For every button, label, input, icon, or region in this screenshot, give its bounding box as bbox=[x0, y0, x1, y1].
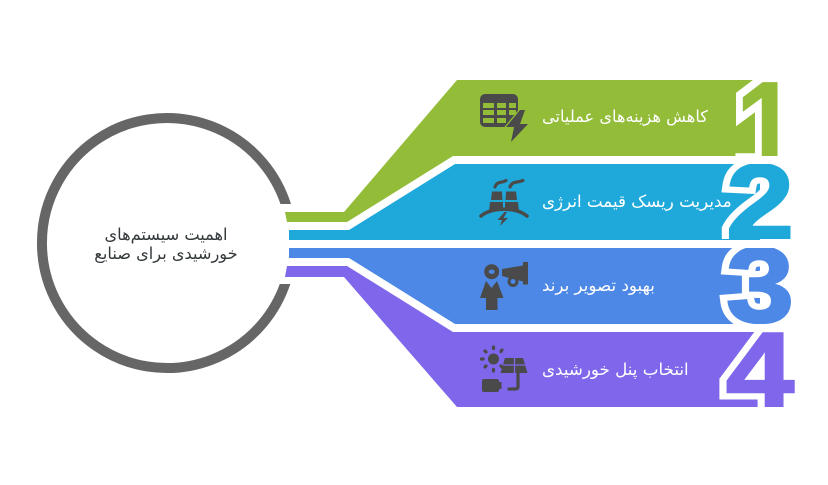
icon: power plant bbox=[481, 180, 527, 226]
center title: اهمیت سیستم‌های bbox=[104, 225, 228, 244]
digit 4 bbox=[719, 332, 795, 407]
band 4 purple bbox=[285, 266, 795, 407]
label 3: بهبود تصویر برند bbox=[542, 275, 655, 295]
icon: sun, solar panel and battery bbox=[482, 347, 528, 392]
icon: person with megaphone bbox=[480, 262, 528, 310]
center title bbox=[94, 225, 238, 263]
digit 2: 2 bbox=[726, 143, 794, 262]
label 2: مدیریت ریسک قیمت انرژی bbox=[542, 191, 732, 211]
digit 3: 3 bbox=[726, 226, 794, 345]
label 4: انتخاب پنل خورشیدی bbox=[542, 359, 689, 379]
label 1: کاهش هزینه‌های عملیاتی bbox=[542, 107, 708, 126]
band 1 green bbox=[285, 80, 778, 222]
center title: خورشیدی برای صنایع bbox=[94, 244, 238, 263]
digit 1: 1 bbox=[735, 53, 799, 204]
digit 3: 3 bbox=[726, 226, 794, 345]
icon: table with lightning bolt bbox=[480, 94, 528, 142]
ring bbox=[42, 118, 288, 368]
band 3 periwinkle bbox=[289, 248, 791, 324]
digit 2: 2 bbox=[726, 143, 794, 262]
digit 3 bbox=[719, 248, 791, 324]
digit 4: 4 bbox=[726, 311, 794, 430]
band 2 blue bbox=[289, 164, 790, 240]
digit 2 bbox=[722, 164, 790, 239]
digit 4: 4 bbox=[726, 311, 794, 430]
